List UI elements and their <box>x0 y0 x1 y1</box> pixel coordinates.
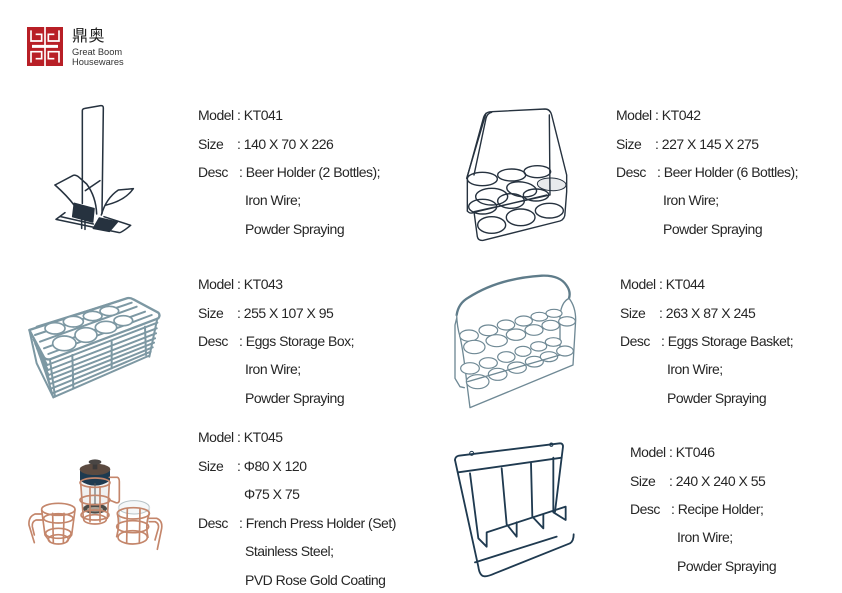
spec text: KT044: Powder Spraying <box>667 390 766 406</box>
product image: KT045 French press holder set <box>28 459 163 550</box>
spec text: KT041: : Beer Holder (2 Bottles); <box>239 164 380 180</box>
spec text: KT045: Stainless Steel; <box>245 543 334 559</box>
product image: KT042 beer holder <box>466 108 568 242</box>
spec text: KT046: : Recipe Holder; <box>671 501 763 517</box>
left holder <box>42 503 75 515</box>
spec text: KT043: Size <box>198 304 223 320</box>
spec text: KT042: Iron Wire; <box>663 192 719 208</box>
French press glass and lid <box>80 459 110 514</box>
spec text: KT041: Desc <box>198 164 228 180</box>
spec text: KT044: Size <box>620 304 645 320</box>
spec text: KT041: Model : KT041 <box>198 107 283 123</box>
spec text: KT045: : French Press Holder (Set) <box>239 515 396 531</box>
spec text: KT042 <box>616 107 798 237</box>
spec text: KT044 <box>620 276 793 406</box>
spec text: KT046: Model : KT046 <box>630 444 715 460</box>
spec text: KT041 <box>198 107 380 237</box>
spec text: KT046: : 240 X 240 X 55 <box>669 472 765 488</box>
spec text: KT046: Desc <box>630 501 660 517</box>
panel: KT041 <box>54 104 380 237</box>
spec text: KT042: : Beer Holder (6 Bottles); <box>657 164 798 180</box>
spec text: KT043 <box>198 276 354 406</box>
spec text: KT043: Iron Wire; <box>245 361 301 377</box>
spec text: KT046 <box>630 444 776 574</box>
spec text: KT045 <box>198 429 396 588</box>
spec text: KT043: Powder Spraying <box>245 390 344 406</box>
brand name: English: Housewares <box>72 56 124 66</box>
logo: Great Boom Housewares <box>27 22 124 66</box>
spec text: KT041: Powder Spraying <box>245 221 344 237</box>
spec text: KT045: Size <box>198 458 223 474</box>
panel: KT042 <box>466 107 798 242</box>
spec text: KT043: Model : KT043 <box>198 276 283 292</box>
spec text: KT044: Desc <box>620 333 650 349</box>
spec text: KT045: PVD Rose Gold Coating <box>245 572 385 588</box>
spec text: KT042: Desc <box>616 164 646 180</box>
spec text: KT044: Iron Wire; <box>667 361 723 377</box>
spec text: KT042: Powder Spraying <box>663 221 762 237</box>
panel: KT046 <box>454 442 776 578</box>
spec text: KT043: : 255 X 107 X 95 <box>237 304 333 320</box>
spec text: KT045: Desc <box>198 515 228 531</box>
spec text: KT041: Size <box>198 136 223 152</box>
panel: KT044 <box>454 274 793 408</box>
brand name: Chinese: 鼎奥 <box>72 22 105 46</box>
product image: KT046 recipe holder <box>454 442 575 578</box>
spec text: KT044: : 263 X 87 X 245 <box>659 304 755 320</box>
product image: KT041 beer holder <box>54 104 134 234</box>
spec text: KT041: : 140 X 70 X 226 <box>237 136 333 152</box>
brand name: English: Great Boom <box>72 47 122 57</box>
icon: red meander square <box>27 27 63 66</box>
spec text: KT044: : Eggs Storage Basket; <box>661 333 793 349</box>
panel: KT045 <box>28 429 396 588</box>
spec text: KT042: Model : KT042 <box>616 107 701 123</box>
spec text: KT042: : 227 X 145 X 275 <box>655 136 759 152</box>
spec text: KT043: : Eggs Storage Box; <box>239 333 354 349</box>
spec text: KT041: Iron Wire; <box>245 192 301 208</box>
spec text: KT045: Model : KT045 <box>198 429 283 445</box>
panel: KT043 <box>28 276 354 406</box>
spec text: KT046: Size <box>630 472 655 488</box>
product image: KT043 eggs storage box <box>28 296 161 398</box>
spec text: KT044: Model : KT044 <box>620 276 705 292</box>
spec text: KT045: Φ75 X 75 <box>244 486 299 502</box>
spec text: KT043: Desc <box>198 333 228 349</box>
product image: KT044 eggs storage basket <box>454 274 576 408</box>
spec text: KT046: Powder Spraying <box>677 558 776 574</box>
spec text: KT042: Size <box>616 136 641 152</box>
spec text: KT046: Iron Wire; <box>677 529 733 545</box>
spec text: KT045: : Φ80 X 120 <box>237 458 306 474</box>
brand name: English <box>72 47 124 66</box>
right holder <box>119 501 149 514</box>
